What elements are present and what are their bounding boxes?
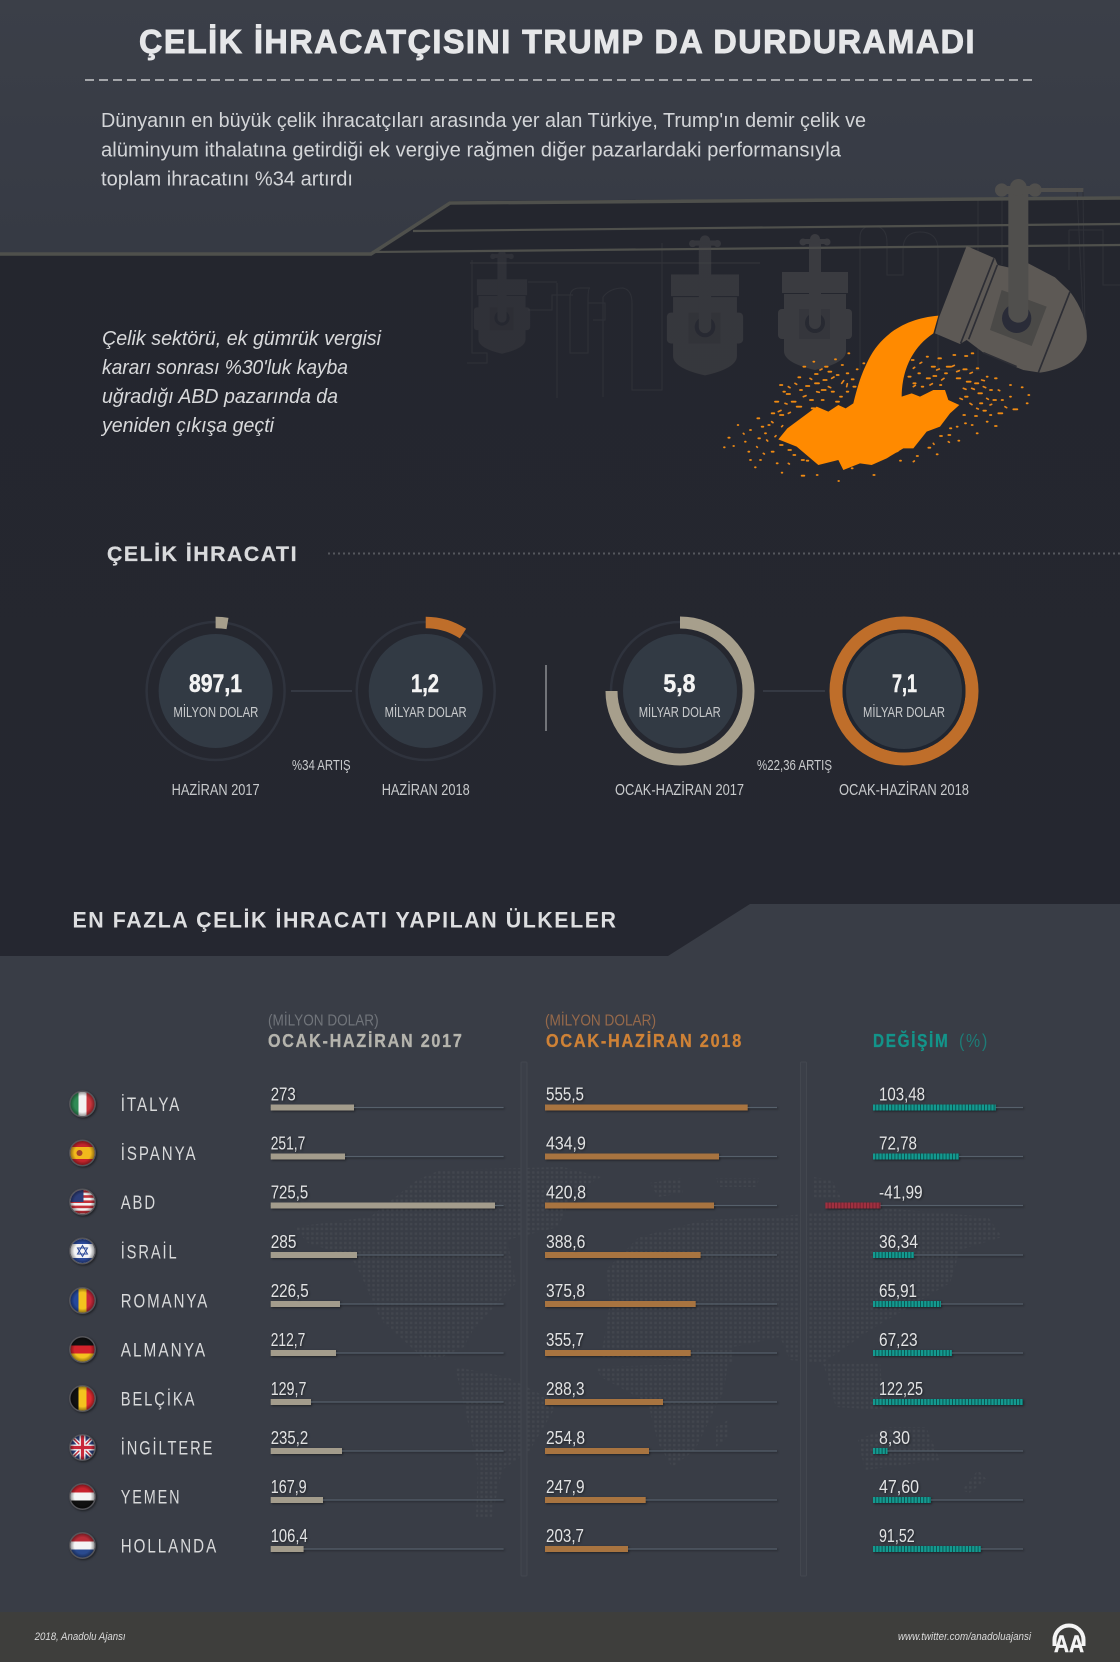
values: 420,8 (546, 1182, 586, 1202)
flag: Romania (69, 1287, 96, 1314)
values: 355,7 (546, 1330, 584, 1350)
ring: Ocak-Haziran 2017: MİLYAR DOLAR (639, 703, 721, 721)
values: 72,78 (879, 1134, 917, 1154)
dotted world map (294, 1167, 1002, 1517)
row: ABD (69, 1182, 1023, 1216)
values: 273 (271, 1084, 296, 1104)
bars (271, 1546, 1023, 1552)
column header: 2018: (MİLYON DOLAR) (545, 1010, 656, 1030)
values: 103,48 (879, 1084, 925, 1104)
row: İspanya: İSPANYA (121, 1144, 198, 1165)
flag: Italy (69, 1090, 96, 1118)
flag: United Kingdom (69, 1434, 96, 1461)
values: 388,6 (546, 1232, 585, 1252)
footer credit: 2018, Anadolu Ajansı (34, 1631, 126, 1643)
row: Belçika (69, 1379, 1023, 1412)
row: ABD: ABD (121, 1193, 157, 1214)
values: 285 (271, 1232, 296, 1252)
panel divider (545, 665, 547, 731)
values: 251,7 (271, 1134, 305, 1154)
values: 8,30 (879, 1428, 910, 1448)
values (271, 1182, 923, 1202)
heading: top destination countries: EN FAZLA ÇELİK İHRACATI YAPILAN ÜLKELER (72, 908, 618, 932)
ladle plate (990, 290, 1047, 346)
ring: Ocak-Haziran 2017 (611, 622, 749, 799)
values: 67,23 (879, 1330, 918, 1350)
bars (271, 1301, 1023, 1307)
row: Yemen: YEMEN (121, 1488, 181, 1508)
row: Almanya (69, 1330, 1023, 1363)
column dividers (521, 1062, 806, 1576)
values: 212,7 (271, 1330, 305, 1350)
flag: Spain (69, 1140, 96, 1166)
values: 288,3 (546, 1379, 584, 1399)
values: 226,5 (271, 1281, 309, 1301)
values: 375,8 (546, 1281, 585, 1301)
row: İsrail (69, 1232, 1023, 1264)
row: İtalya: İTALYA (121, 1095, 181, 1116)
ring: Haziran 2018 (357, 622, 495, 799)
flag: Germany (69, 1336, 96, 1363)
intro paragraph: toplam ihracatını %34 artırdı (101, 168, 353, 190)
panel: steel export rings (147, 622, 972, 799)
row: Almanya: ALMANYA (121, 1340, 207, 1362)
values (271, 1134, 917, 1154)
ring: Ocak-Haziran 2018: MİLYAR DOLAR (863, 703, 945, 721)
values (271, 1330, 918, 1350)
column header: 2018: OCAK-HAZİRAN 2018 (546, 1031, 743, 1051)
ring: Haziran 2018: 1,2 (411, 670, 439, 698)
row: İsrail: İSRAİL (121, 1242, 179, 1264)
row: İspanya (69, 1134, 1023, 1166)
thin pipes (467, 190, 1120, 398)
bars (271, 1448, 1023, 1454)
label: %34 artış: %34 ARTIŞ (292, 757, 351, 774)
values: 254,8 (546, 1428, 585, 1448)
values: 434,9 (546, 1134, 586, 1154)
icon: Anadolu Agency logo: AA (1054, 1631, 1084, 1658)
values (271, 1379, 923, 1399)
ring: Haziran 2018: MİLYAR DOLAR (385, 703, 467, 721)
faded ladles (474, 234, 852, 375)
title: ÇELİK İHRACATÇISINI TRUMP DA DURDURAMADI (139, 23, 976, 60)
bars (271, 1399, 1023, 1405)
ring: Haziran 2017: MİLYON DOLAR (173, 703, 259, 721)
values (271, 1428, 910, 1448)
values: 555,5 (546, 1084, 584, 1104)
rails (0, 198, 1120, 263)
bars (271, 1497, 1023, 1503)
footer link: www.twitter.com/anadoluajansi (898, 1631, 1031, 1643)
ring: Haziran 2018: HAZİRAN 2018 (382, 780, 470, 799)
sparks (724, 353, 1029, 481)
row: Belçika: BELÇİKA (121, 1390, 196, 1410)
values: 91,52 (879, 1526, 915, 1546)
ring: Haziran 2017 (147, 622, 285, 799)
flag: Belgium (69, 1385, 96, 1412)
values: 167,9 (271, 1477, 307, 1497)
row: Hollanda: HOLLANDA (121, 1536, 218, 1558)
connector lines (291, 690, 825, 692)
row: İngiltere (69, 1428, 1023, 1461)
row: Hollanda (69, 1526, 1023, 1559)
molten stream (778, 316, 959, 470)
column header: 2017 (268, 1010, 464, 1051)
flag: USA (69, 1188, 96, 1216)
values: 122,25 (879, 1379, 923, 1399)
values (271, 1084, 925, 1104)
panel: top header band (0, 0, 1120, 253)
main ladle and molten stream (724, 179, 1087, 481)
italic note: yeniden çıkışa geçti (100, 415, 275, 437)
ring: Ocak-Haziran 2018 (836, 623, 972, 799)
flag: Israel (69, 1238, 96, 1264)
bars (271, 1252, 1023, 1258)
bars (271, 1104, 1023, 1110)
values (271, 1281, 917, 1301)
label: %22,36 artış: %22,36 ARTIŞ (757, 757, 832, 774)
italic note: Çelik sektörü, ek gümrük vergisi (102, 328, 382, 350)
values: 36,34 (879, 1232, 918, 1252)
values: 247,9 (546, 1477, 584, 1497)
row: İtalya (69, 1084, 1023, 1118)
row: Yemen (69, 1477, 1023, 1510)
flag: Yemen (69, 1483, 96, 1510)
illustration: steel ladles pouring molten metal (0, 179, 1120, 481)
ladle body (935, 246, 1087, 373)
values (271, 1526, 915, 1546)
column header: 2018 (545, 1010, 743, 1051)
intro paragraph (101, 110, 866, 190)
values (271, 1232, 918, 1252)
values (271, 1477, 919, 1497)
ring: Ocak-Haziran 2018: OCAK-HAZİRAN 2018 (839, 780, 969, 799)
flag: Netherlands (69, 1532, 96, 1559)
values: 129,7 (271, 1379, 306, 1399)
values: 725,5 (271, 1182, 308, 1202)
values: 47,60 (879, 1477, 919, 1497)
values: 106,4 (271, 1526, 308, 1546)
intro paragraph: Dünyanın en büyük çelik ihracatçıları arasında yer alan Türkiye, Trump'ın demir çelik ve (101, 110, 866, 132)
heading dotted rule (328, 552, 1120, 554)
column header: 2017: (MİLYON DOLAR) (268, 1010, 379, 1030)
column header: 2017: OCAK-HAZİRAN 2017 (268, 1031, 464, 1051)
ring: Ocak-Haziran 2017: 5,8 (663, 670, 695, 698)
bars (271, 1154, 1023, 1160)
row: İngiltere: İNGİLTERE (121, 1438, 214, 1460)
ring: Ocak-Haziran 2017: OCAK-HAZİRAN 2017 (615, 780, 744, 799)
intro paragraph: alüminyum ithalatına getirdiği ek vergiye rağmen diğer pazarlardaki performansıyla (101, 140, 842, 162)
values: 65,91 (879, 1281, 917, 1301)
column header: change: (%) (959, 1031, 989, 1051)
heading: çelik ihracatı: ÇELİK İHRACATI (107, 543, 298, 566)
values: -41,99 (879, 1182, 923, 1202)
ring: Haziran 2017: 897,1 (189, 670, 242, 698)
ring: Haziran 2017: HAZİRAN 2017 (172, 780, 260, 799)
italic note (100, 328, 382, 437)
column header: change: DEĞİŞİM (873, 1030, 949, 1051)
row: Romanya (69, 1281, 1023, 1314)
italic note: uğradığı ABD pazarında da (102, 386, 338, 408)
ring: Ocak-Haziran 2018: 7,1 (892, 670, 917, 698)
bars (271, 1350, 1023, 1356)
footer (0, 1612, 1120, 1662)
panel: countries table background (0, 904, 1120, 1612)
row: Romanya: ROMANYA (121, 1292, 209, 1312)
extra sparks (743, 362, 1007, 464)
values: 203,7 (546, 1526, 584, 1546)
title divider dashed line (85, 79, 1036, 81)
values: 235,2 (271, 1428, 308, 1448)
italic note: kararı sonrası %30'luk kayba (102, 357, 348, 379)
bars (271, 1202, 1023, 1208)
